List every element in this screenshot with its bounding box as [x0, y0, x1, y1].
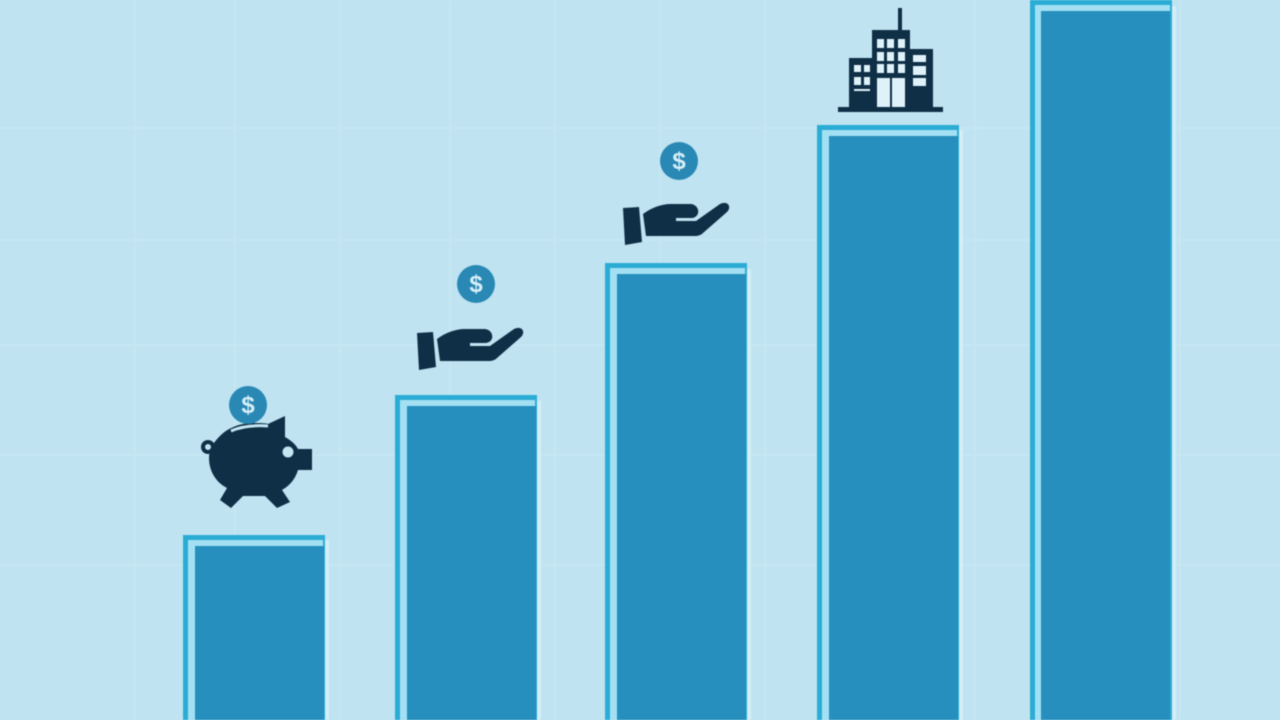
bar 3: [605, 263, 751, 720]
icon: piggy bank: [203, 416, 312, 508]
icon: dollar coin above hand 2: $: [672, 148, 686, 175]
icon: open hand 1: [417, 328, 523, 370]
bar 2: [395, 395, 541, 720]
bar 1: [183, 535, 329, 720]
icon: open hand 2: [623, 203, 729, 245]
bar 4: [817, 125, 963, 720]
icon: dollar coin above hand 1: [457, 265, 495, 303]
icon: dollar coin above piggy bank: $: [241, 392, 255, 419]
icon: dollar coin above piggy bank: [229, 386, 267, 424]
bar 5: [1030, 0, 1176, 720]
icon: dollar coin above hand 1: $: [469, 271, 483, 298]
icon: dollar coin above hand 2: [660, 142, 698, 180]
icon: office building: [838, 8, 943, 112]
